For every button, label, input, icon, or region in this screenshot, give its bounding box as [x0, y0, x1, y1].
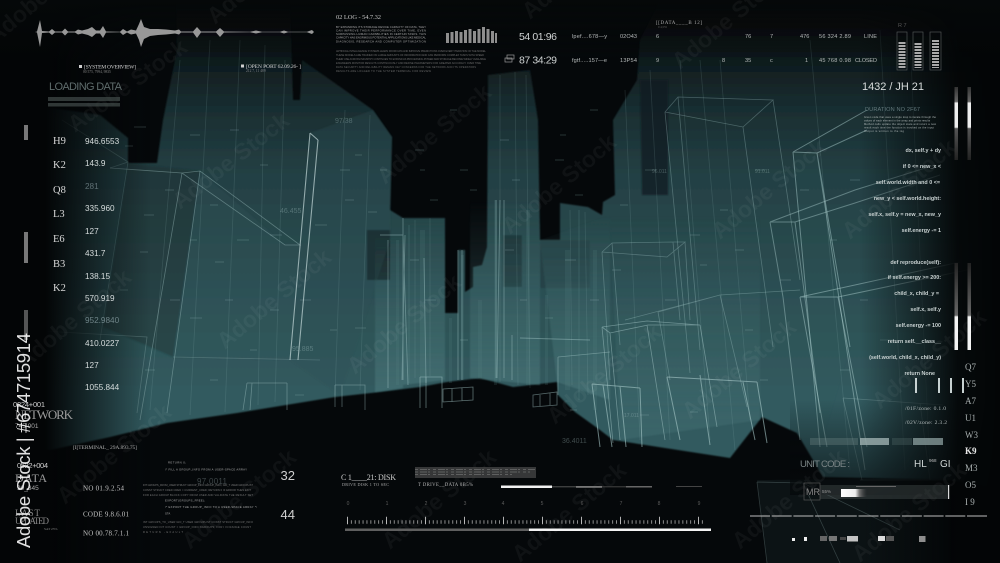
duration note: Given code that uses a single loop to iterate through the: [864, 115, 937, 119]
faint glass box lower right: [757, 478, 950, 563]
terminal code block: INT GROUPS_TO_USER GID_T USER GROUPLIST CONST STRUCT GROUP_INFO: [143, 520, 253, 524]
data table: c: [770, 58, 773, 64]
ruler scale: 6: [581, 501, 584, 507]
data specks on buildings: [120, 110, 893, 415]
duration note: values of each element in the array and prints results: [864, 118, 931, 122]
data header: [656, 21, 702, 30]
data table: 1: [805, 58, 808, 64]
left gauge ticks: [24, 125, 28, 340]
timer readouts: 54 01:96: [519, 31, 557, 43]
unit code: HL: [914, 459, 927, 470]
log long paragraph: THEIR USE ACROSS INDUSTRY CONTINUES TO EXPAND AS PROCESSING POWER AND STORAGE BECOME WIDELY AVAILABLE: [336, 57, 486, 61]
right code labels: I 9: [965, 497, 975, 507]
disk label: DRIVE DISK 1 TO SEC: [342, 482, 389, 487]
log long paragraph: RESULTS ARE LOGGED TO THE SYSTEM TERMINAL FOR REVIEW: [336, 69, 432, 73]
panel: system overview header: [79, 64, 136, 75]
code listing: [868, 148, 942, 377]
left number column: 410.0227: [85, 339, 120, 348]
counters: 44: [280, 507, 295, 522]
status bars: [810, 438, 943, 445]
status dots: [792, 536, 926, 542]
faint numeric labels: 97/38: [335, 118, 353, 125]
last updated block: [15, 508, 58, 531]
faint numeric labels: 17.011: [624, 413, 639, 419]
terminal code block: STA: [165, 512, 170, 516]
vignette left: [0, 0, 150, 563]
noise block: [415, 467, 536, 478]
data table: 6: [656, 34, 659, 40]
data header: 0 4,555: [658, 25, 668, 30]
drive data label: T DRIVE__DATA 0B5%: [418, 483, 473, 488]
left number column: 335.960: [85, 204, 115, 213]
level meters: R 7: [898, 23, 907, 29]
panel: open port header: 212 7, 11 489: [246, 69, 266, 74]
data block: [15, 461, 48, 492]
code listing: dx, self.y + dy: [905, 148, 941, 154]
data table: 35: [745, 58, 751, 64]
stock watermarks: Adobe Stock: [867, 303, 991, 414]
right code labels: M3: [965, 463, 978, 473]
counters: [280, 468, 295, 522]
terminal code block: RETURN 0;: [168, 460, 186, 464]
network block: 745 001: [15, 423, 39, 430]
stock watermarks: Adobe Stock: [12, 263, 136, 374]
vignette top: [0, 0, 1000, 60]
data table: 8: [722, 58, 725, 64]
faint numeric labels: 91.011: [755, 169, 770, 175]
duration note: DURATION NO 2F67: [865, 107, 920, 113]
code numbers: [83, 484, 130, 538]
data header: [[DATA____B 12]: [656, 21, 702, 26]
loading bars: [48, 97, 120, 106]
panel: log: [336, 14, 487, 73]
code numbers: NO 01.9.2.54: [83, 484, 124, 492]
code listing: if self.energy >= 200:: [888, 275, 941, 281]
left code labels: K2: [53, 283, 66, 294]
stock watermarks: Adobe Stock: [707, 133, 831, 244]
stock watermarks: Adobe Stock: [52, 398, 176, 509]
right code labels: U1: [965, 413, 976, 423]
terminal code block: EXPORT(GROUPS_FREE);: [165, 498, 205, 502]
zone labels: [905, 406, 947, 426]
timer readouts: 87 34:29: [519, 54, 557, 66]
disk label: [341, 473, 396, 487]
code listing: def reproduce(self):: [890, 260, 941, 266]
terminal code block: INT GROUPS_FROM_USER STRUCT GROUP_INFO GROUP_INFO, GID_T USER GROUPLIST: [143, 483, 253, 487]
stock watermarks: Adobe Stock: [727, 443, 851, 554]
data block: 0522+004: [17, 461, 48, 470]
icon: copy windows: [505, 55, 514, 62]
left code labels: B3: [53, 259, 65, 270]
right code labels: K9: [965, 446, 977, 456]
wireframe right buildings: [533, 97, 967, 563]
ruler scale: [347, 501, 703, 522]
code listing: self.energy -= 1: [902, 228, 941, 234]
terminal code block: /* FILL A GROUP_INFO FROM A USER-SPACE ARRAY: [165, 468, 247, 472]
left number column: 431.7: [85, 249, 106, 258]
terminal code block: FOR EACH GROUP BLOCK COPY FROM USER AND VALIDATE THE RESULT SET: [143, 493, 253, 497]
code listing: self.world.width and 0 <=: [876, 180, 940, 186]
right code labels: Y5: [965, 379, 976, 389]
terminal code block: UNSIGNED INT COUNT = GROUP_INFO NGROUPS; FOR I IN RANGE COUNT: [143, 525, 251, 529]
left number column: 952.9840: [85, 316, 120, 325]
code listing: self.energy -= 100: [896, 323, 941, 329]
left code labels: Q8: [53, 185, 66, 196]
left number column: 946.6553: [85, 137, 120, 146]
data table: 76: [745, 34, 751, 40]
ruler scale: 9: [698, 501, 701, 507]
faint numeric labels: 46.455: [280, 208, 302, 215]
stock watermarks: Adobe Stock: [212, 243, 336, 354]
network block: [13, 400, 74, 430]
data table: LINE: [864, 34, 877, 40]
white tick marks: [915, 378, 964, 393]
waveform: [35, 19, 314, 47]
data table: lpef....678—y: [572, 34, 607, 40]
left number column: 143.9: [85, 159, 106, 168]
ruler scale: 0: [347, 501, 350, 507]
right code labels: Q7: [965, 362, 976, 372]
ruler scale: 5: [541, 501, 544, 507]
center tower lines: [380, 200, 590, 388]
data table: 7: [770, 34, 773, 40]
terminal code block: [143, 460, 257, 534]
data table: [572, 34, 877, 64]
log long paragraph: [336, 49, 487, 73]
right code labels: W3: [965, 430, 978, 440]
panel: system overview header: 00 575, 7994, 9835: [83, 70, 111, 75]
panel: open port header: [OPEN PORT 62.09.26- ]: [246, 64, 301, 70]
ruler scale: 8: [658, 501, 661, 507]
stock watermarks: Adobe Stock: [342, 268, 466, 379]
left number column: 127: [85, 361, 99, 370]
faint numeric labels: 36.4011: [562, 438, 587, 445]
ruler scale: 3: [464, 501, 467, 507]
code listing: self.x, self.y: [910, 307, 941, 313]
left code labels: E6: [53, 234, 65, 245]
wireframe left buildings: [25, 120, 473, 420]
code numbers: CODE 9.8.6.01: [83, 510, 130, 518]
log short paragraph: CAPACITY HAS ENORMOUS POTENTIAL APPLICATIONS LIKE MEDICAL: [336, 36, 426, 40]
last updated block: UPDATED: [15, 516, 50, 526]
dashed divider: [750, 515, 987, 517]
stock watermarks: Adobe Stock: [677, 313, 801, 424]
last updated block: SAT 23%: [44, 527, 58, 531]
terminal code block: CONST STRUCT CRED CRED = CURRENT_CRED; RETURN 0 IF ERROR THEN EXIT: [143, 488, 251, 492]
data table: 56 324 2.89: [819, 34, 851, 40]
last updated block: LAST: [15, 508, 40, 518]
network block: 0224+001: [13, 400, 45, 409]
city tower strips: [396, 200, 597, 410]
stock watermarks: Adobe Stock: [177, 443, 301, 554]
unit code: UNIT CODE :: [800, 459, 850, 470]
terminal header: [I[TERMINAL_ 29A.893.75]: [73, 445, 137, 451]
left code labels: K2: [53, 160, 66, 171]
data table: 476: [800, 34, 809, 40]
building tone variations: [103, 80, 850, 447]
left number column: 570.919: [85, 294, 115, 303]
code listing: (self.world, child_x, child_y): [869, 355, 941, 361]
stock watermarks: Adobe Stock: [372, 78, 496, 189]
level meters: [897, 23, 941, 70]
heading: loading data: LOADING DATA: [49, 81, 123, 93]
left number column: 127: [85, 227, 99, 236]
log short paragraph: DIAGNOSIS, RESEARCH AND COMPUTER OPTIMIZATION: [336, 40, 426, 44]
log short paragraph: BY EXPANDING ITS STORAGE DEVICE CAPACITY OF DATA, THEY: [336, 25, 426, 29]
ruler progress bar: [345, 528, 711, 531]
network block: NETWORK: [15, 407, 74, 422]
left number column: 281: [85, 182, 99, 191]
vertical grid lines: [150, 30, 930, 470]
left number column: 138.15: [85, 272, 110, 281]
vertical watermark: Adobe Stock | #674715914: [13, 333, 34, 548]
disk label: C 1____21: DISK: [341, 473, 396, 482]
right code labels: A7: [965, 396, 976, 406]
drive progress segments: [501, 486, 702, 488]
code numbers: NO 00.78.7.1.1: [83, 530, 130, 538]
data table: fgtf.....157—e: [572, 58, 607, 64]
log long paragraph: THESE MODELS ARE TRAINED ON LARGE AMOUNTS OF INFORMATION AND CAN PERFORM COMPLEX TASKS WITH SPEED: [336, 53, 484, 57]
ruler scale: 4: [502, 501, 505, 507]
code listing: if 0 <= new_x <: [903, 164, 941, 170]
data table: 9: [656, 58, 659, 64]
stock watermarks: Adobe Stock: [837, 133, 961, 244]
panel: system overview header: [SYSTEM OVERVIEW]: [84, 64, 136, 70]
ruler scale: 1: [386, 501, 389, 507]
stock watermarks: Adobe Stock: [167, 107, 294, 214]
left code labels: L3: [53, 209, 65, 220]
duration note: [864, 107, 937, 133]
left code labels: [53, 136, 66, 294]
faint numeric labels: 96.011: [652, 169, 667, 175]
terminal code block: 97.0011: [197, 477, 228, 486]
panel: open port header: [241, 64, 301, 74]
stock watermarks: Adobe Stock: [377, 443, 501, 554]
log long paragraph: ENGINEERS MONITOR RESULTS CONTINUOUSLY AND REFINE PARAMETERS FOR GREATER ACCURACY OVER TIME: [336, 61, 481, 65]
left number column: [85, 137, 120, 392]
progress module MR: MR: [806, 487, 820, 497]
data table: CLOSED: [855, 58, 877, 64]
faint numeric labels: [280, 118, 770, 445]
timer readouts: [519, 31, 557, 66]
data block: DATA: [15, 471, 47, 485]
counters: 32: [280, 468, 295, 483]
ruler scale: 2: [425, 501, 428, 507]
data table: 13P54: [620, 58, 637, 64]
stock watermarks: Adobe Stock: [497, 128, 621, 239]
code listing: child_x, child_y =: [894, 291, 939, 297]
data block: 90_345: [17, 485, 39, 492]
vignette right: [860, 0, 1000, 563]
code listing: new_y < self.world.height:: [874, 196, 941, 202]
duration note: result each time the function is invoked on the input: [864, 126, 934, 130]
duration note: Output is written to the log: [864, 129, 905, 133]
left lower labels: [13, 400, 74, 531]
duration note: Method calls update the object state and return a new: [864, 122, 936, 126]
ruler scale: 7: [620, 501, 623, 507]
terminal code block: /* EXPORT THE GROUP_INFO TO A USER-SPACE ARRAY */: [165, 505, 257, 509]
heading: unit id: 1432 / JH 21: [862, 81, 924, 93]
log title: 02 LOG - 54.7.32: [336, 14, 381, 21]
lower right shade: [790, 400, 1000, 495]
data table: 02O43: [620, 34, 637, 40]
code listing: return None: [904, 371, 935, 377]
code listing: self.x, self.y = new_x, new_y: [868, 212, 941, 218]
progress module MR: [804, 483, 949, 500]
log short paragraph: [336, 25, 426, 44]
data table: 45 768 0.98: [819, 58, 851, 64]
bar chart: [446, 27, 497, 43]
left code labels: H9: [53, 136, 66, 147]
stock watermarks: Adobe Stock: [63, 33, 192, 137]
terminal code block: RETURN -EFAULT: [143, 530, 183, 534]
left number column: 1055.844: [85, 383, 120, 392]
right code labels: [965, 362, 978, 507]
log long paragraph: DATA SECURITY AND RELIABILITY REMAIN KEY CONCERNS FOR THE NETWORK AND ITS OPERATORS: [336, 65, 476, 69]
zone labels: /02V/zone: 2.3.2: [905, 420, 947, 426]
right code labels: O5: [965, 480, 976, 490]
unit code: 968: [929, 458, 937, 463]
zone labels: /01F/zone: 0.1.0: [905, 406, 946, 412]
log short paragraph: CAN IMPROVE THEIR PERFORMANCE OVER TIME, EVEN: [336, 28, 426, 32]
faint numeric labels: 95.885: [292, 346, 314, 353]
stock watermarks: Adobe Stock: [542, 318, 666, 429]
vertical meters lower: [954, 263, 971, 350]
log short paragraph: SURPASSING HUMAN CAPABILITIES IN CERTAIN TASKS. THIS: [336, 32, 426, 36]
unit code: GI: [940, 459, 951, 470]
unit code: [800, 458, 951, 470]
progress module MR: 55%: [822, 489, 831, 494]
code listing: return self.__class__: [888, 339, 942, 345]
vertical meters upper: [954, 87, 971, 160]
log long paragraph: ARTIFICIAL INTELLIGENCE SYSTEMS LEARN FROM DATA AND IMPROVE PREDICTIONS OVER EVERY ITERATION OF THE MODEL: [336, 49, 487, 53]
